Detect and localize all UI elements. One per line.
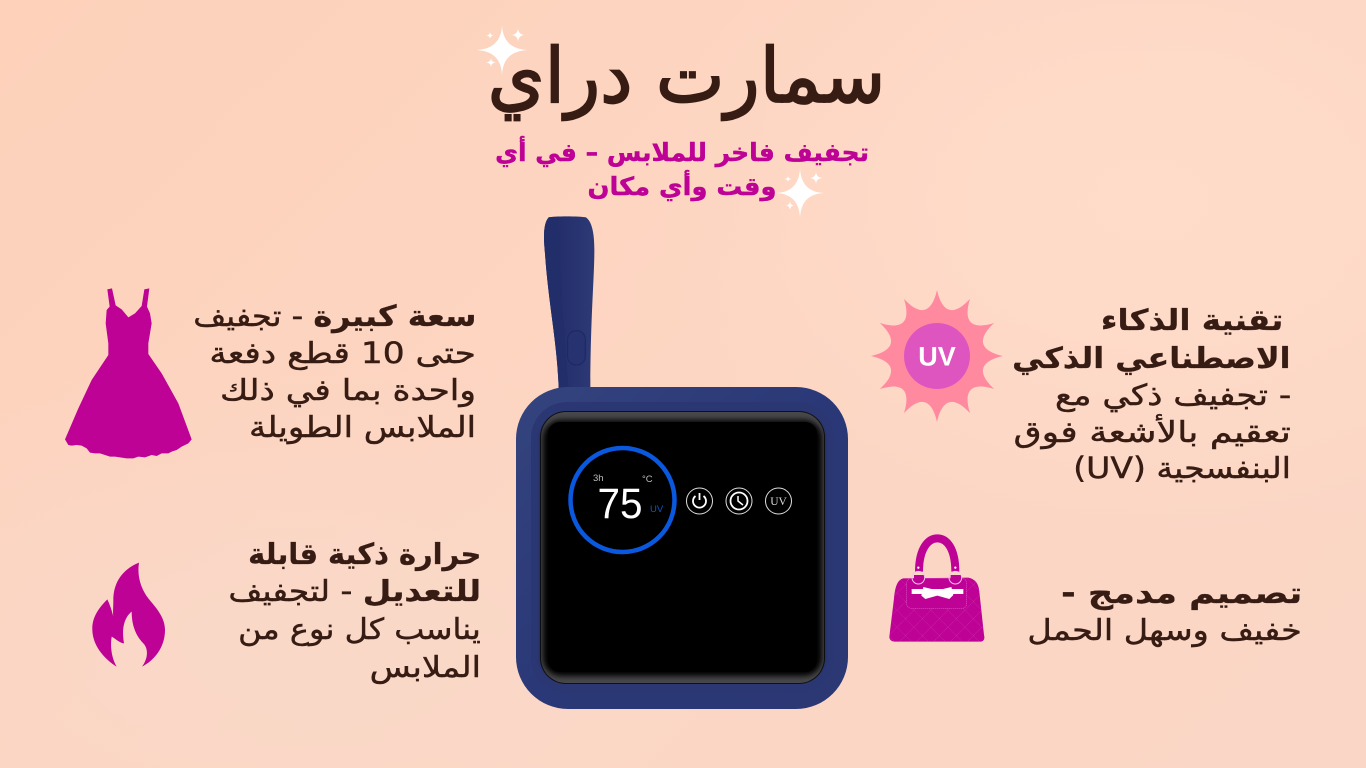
title: سمارت دراي <box>487 31 885 120</box>
display readout: 3h <box>593 473 604 484</box>
text block: compact design: تصميم مدمج - <box>1061 576 1302 610</box>
text block: adjustable heat: حرارة ذكية قابلة <box>248 537 481 571</box>
text block: AI technology <box>1013 303 1291 485</box>
text block: large capacity: سعة كبيرة - تجفيف <box>193 299 476 333</box>
icon: UV sun: UV <box>918 342 956 372</box>
text block: adjustable heat <box>228 537 481 684</box>
icon: flame <box>92 563 165 667</box>
product screen <box>540 411 825 684</box>
text block: large capacity: واحدة بما في ذلك <box>220 373 476 407</box>
text block: adjustable heat: يناسب كل نوع من <box>238 612 481 646</box>
display ring <box>570 448 674 552</box>
product strap <box>544 216 594 388</box>
display readout: 75 <box>598 480 642 528</box>
icon: UV sun <box>871 290 1003 422</box>
icon: dress <box>65 288 192 458</box>
sparkle: subtitle <box>776 168 824 218</box>
text block: compact design: خفيف وسهل الحمل <box>1028 613 1302 647</box>
text block: AI technology: البنفسجية (UV) <box>1073 451 1291 485</box>
subtitle <box>495 136 869 202</box>
text block: AI technology: الاصطناعي الذكي <box>1013 341 1291 375</box>
product: smart dryer <box>516 216 848 709</box>
subtitle: تجفيف فاخر للملابس – في أي <box>495 138 869 167</box>
text block: AI technology: تعقيم بالأشعة فوق <box>1014 415 1291 449</box>
button: UV: UV <box>770 496 787 508</box>
text block: adjustable heat: الملابس <box>370 650 481 684</box>
text block: large capacity: حتى 10 قطع دفعة <box>210 336 476 370</box>
text block: compact design <box>1028 576 1302 648</box>
icon: handbag <box>889 538 984 642</box>
display readout: °C <box>642 474 653 485</box>
button: power <box>686 488 712 514</box>
text block: AI technology: تقنية الذكاء <box>1101 303 1283 337</box>
subtitle: وقت وأي مكان <box>588 172 777 201</box>
display readout: UV <box>650 504 664 515</box>
text block: adjustable heat: للتعديل - لتجفيف <box>228 574 481 608</box>
display readout <box>593 473 664 528</box>
button: timer <box>726 488 752 514</box>
text block: large capacity: الملابس الطويلة <box>249 410 476 444</box>
product body <box>516 387 848 709</box>
button: UV <box>766 488 792 514</box>
text block: large capacity <box>193 299 476 444</box>
sparkle: title <box>476 25 528 75</box>
text block: AI technology: - تجفيف ذكي مع <box>1055 378 1291 412</box>
